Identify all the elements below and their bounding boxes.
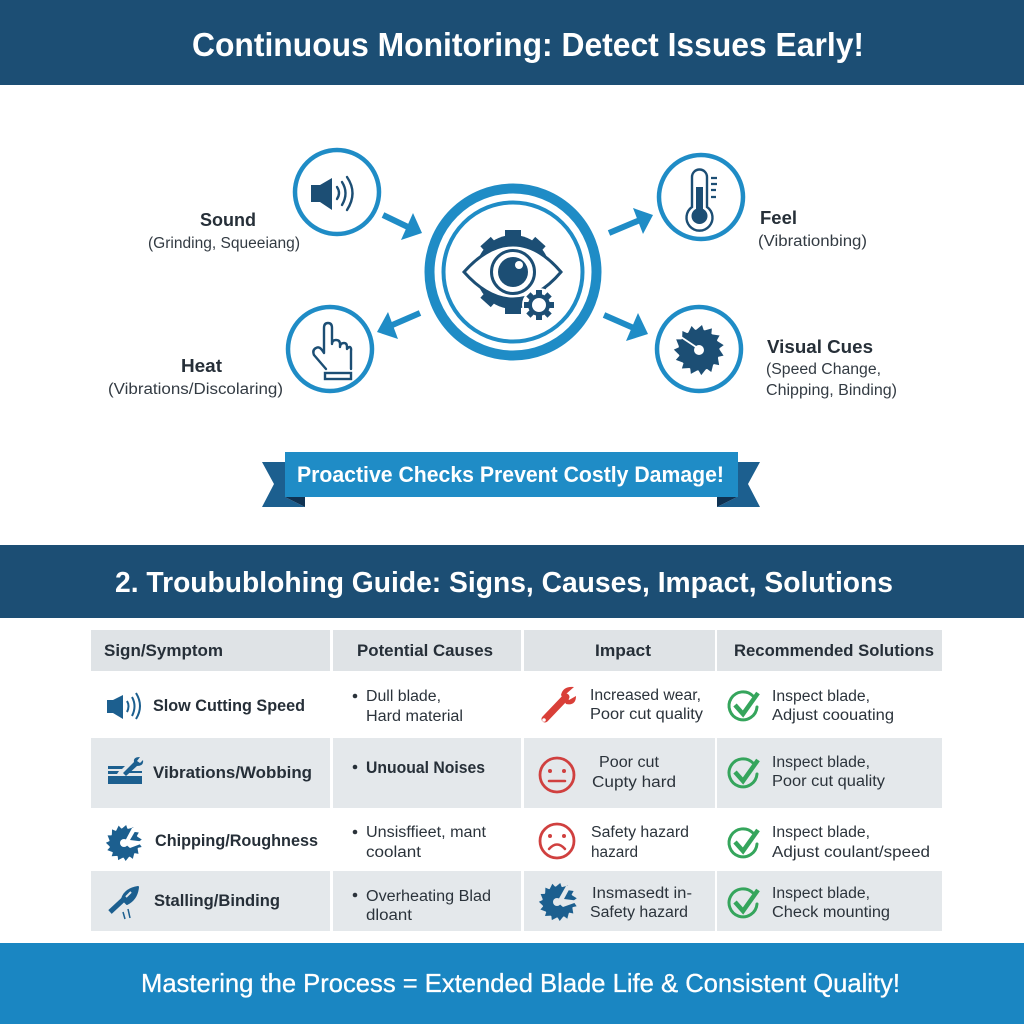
table row 3: chipping: Adjust coulant/speed — [772, 844, 930, 861]
label: sound: (Grinding, Squeeiang) — [148, 235, 300, 252]
central eye and gear icon — [430, 188, 596, 356]
table row 3: chipping: Unsisffieet, mant — [366, 824, 487, 841]
table row 3: chipping: Safety hazard — [591, 824, 689, 841]
table row 4: stalling: Stalling/Binding — [154, 892, 280, 910]
label: feel: (Vibrationbing) — [758, 233, 867, 250]
label: visual cues: Visual Cues — [767, 337, 873, 357]
table row 3: chipping: Inspect blade, — [772, 824, 870, 841]
table row 4: stalling — [91, 871, 942, 931]
top title banner — [0, 0, 1024, 85]
table row 3: chipping: hazard — [591, 844, 638, 861]
label: visual cues: Chipping, Binding) — [766, 382, 897, 399]
troubleshooting table — [91, 630, 942, 931]
table row 1: slow cutting speed: Poor cut quality — [590, 706, 703, 723]
table row 2: vibrations: Poor cut — [599, 754, 660, 771]
table row 4: stalling: Insmasedt in- — [592, 885, 692, 902]
callout ribbon — [262, 452, 760, 507]
label: sound — [148, 210, 300, 252]
table row 3: chipping: Chipping/Roughness — [155, 832, 318, 850]
table row 1: slow cutting speed: Adjust coouating — [772, 707, 894, 724]
table row 1: slow cutting speed: Dull blade, — [366, 688, 441, 705]
table row 2: vibrations: Inspect blade, — [772, 754, 870, 771]
title: Continuous Monitoring: Detect Issues Early! — [192, 26, 864, 63]
table row 3: chipping: coolant — [366, 844, 422, 861]
label: visual cues: (Speed Change, — [766, 361, 881, 378]
table row 2: vibrations: Poor cut quality — [772, 773, 885, 790]
label: heat: (Vibrations/Discolaring) — [108, 381, 283, 398]
label: feel — [758, 208, 867, 250]
section heading banner: 2. Troubublohing Guide: Signs, Causes, Impact, Solutions — [115, 567, 893, 599]
table row 2: vibrations: Vibrations/Wobbing — [153, 764, 312, 782]
bottom takeaway banner: Mastering the Process = Extended Blade Life & Consistent Quality! — [141, 968, 900, 998]
table row 1: slow cutting speed: Increased wear, — [590, 687, 701, 704]
label: visual cues — [766, 337, 897, 399]
central monitoring diagram — [288, 150, 743, 391]
table header row: Impact — [595, 642, 652, 660]
callout ribbon: Proactive Checks Prevent Costly Damage! — [297, 462, 724, 487]
table row 4: stalling: Safety hazard — [590, 904, 688, 921]
arrow: centre to hand — [377, 312, 420, 339]
table header row — [91, 630, 942, 671]
table header row: Recommended Solutions — [734, 642, 934, 660]
table header row: Potential Causes — [357, 642, 493, 660]
table row 1: slow cutting speed — [107, 687, 894, 725]
icon: pointing hand — [288, 307, 372, 391]
table row 4: stalling: Inspect blade, — [772, 885, 870, 902]
table row 3: chipping — [106, 824, 930, 861]
icon: sound — [295, 150, 379, 234]
table row 1: slow cutting speed: Slow Cutting Speed — [153, 697, 305, 715]
label: feel: Feel — [760, 208, 797, 228]
table row 1: slow cutting speed: Inspect blade, — [772, 688, 870, 705]
arrow: sound to centre — [383, 213, 422, 240]
table row 4: stalling: Overheating Blad — [366, 888, 491, 905]
table row 2: vibrations: Cupty hard — [592, 774, 676, 791]
label: heat — [108, 356, 283, 398]
table row 1: slow cutting speed: Hard material — [366, 708, 463, 725]
bottom takeaway banner — [0, 943, 1024, 1024]
table row 2: vibrations: Unuoual Noises — [366, 759, 485, 777]
icon: saw blade — [657, 307, 741, 391]
table row 4: stalling: dloant — [366, 907, 413, 924]
arrow: centre to saw — [604, 313, 648, 341]
label: sound: Sound — [200, 210, 256, 230]
arrow: centre to thermometer — [609, 208, 653, 234]
table row 2: vibrations — [91, 738, 942, 808]
section heading banner — [0, 545, 1024, 618]
table row 4: stalling: Check mounting — [772, 904, 890, 921]
table header row: Sign/Symptom — [104, 642, 223, 660]
icon: thermometer — [659, 155, 743, 239]
label: heat: Heat — [181, 356, 222, 376]
